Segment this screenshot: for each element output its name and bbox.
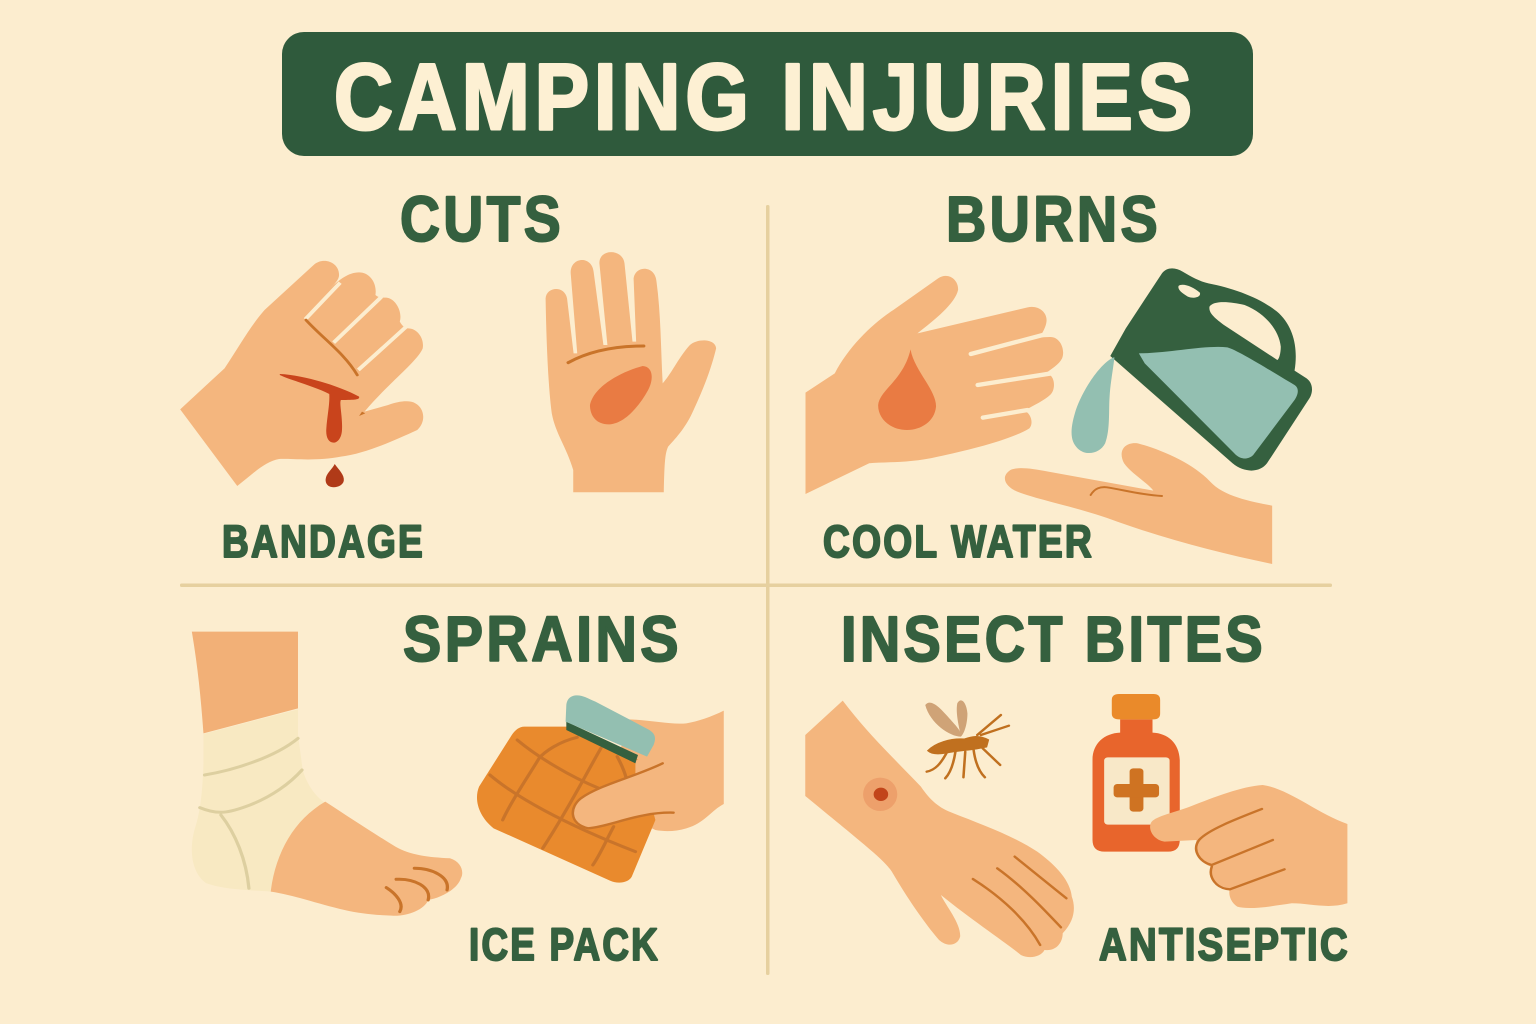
icon: antiseptic bottle <box>1093 694 1180 852</box>
heading: insect bites: INSECT BITES <box>841 603 1266 675</box>
heading: cuts: CUTS <box>400 183 564 255</box>
heading: sprains: SPRAINS <box>403 603 682 675</box>
panel: sprains <box>192 603 724 970</box>
illustration: pointing hand <box>1150 785 1347 908</box>
heading: burns: BURNS <box>946 183 1161 255</box>
title: CAMPING INJURIES <box>334 44 1197 149</box>
panel: burns <box>805 183 1312 567</box>
label: cool water: COOL WATER <box>823 516 1094 567</box>
illustration: burned hand <box>805 276 1063 494</box>
icon: mosquito <box>925 700 1009 778</box>
label: ice pack: ICE PACK <box>469 919 660 970</box>
label: antiseptic: ANTISEPTIC <box>1099 919 1350 970</box>
illustration: bleeding hand <box>180 261 423 487</box>
panel: cuts <box>180 183 716 567</box>
illustration: ice pack in hand <box>477 695 724 883</box>
illustration: water jug pouring <box>1072 268 1312 471</box>
illustration: palm with wound <box>546 252 716 492</box>
label: bandage: BANDAGE <box>222 516 425 567</box>
illustration: hand under water <box>1005 443 1272 564</box>
illustration: bandaged ankle <box>192 632 462 916</box>
title banner <box>282 32 1253 156</box>
panel: insect bites <box>805 603 1350 970</box>
illustration: arm with bite <box>805 701 1074 957</box>
